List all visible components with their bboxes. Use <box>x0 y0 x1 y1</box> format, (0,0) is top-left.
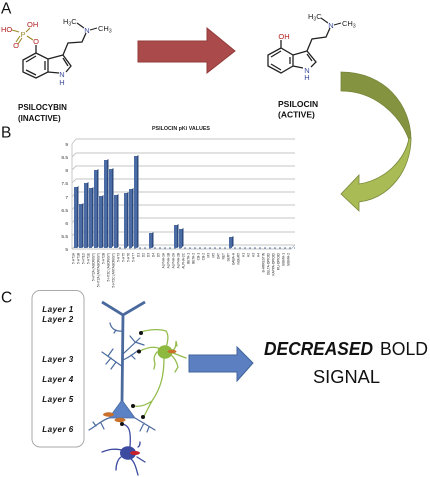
orange synapses <box>103 412 126 422</box>
bar chart: psilocin pKi values: 8.5 <box>61 155 68 161</box>
bar chart: psilocin pKi values: NET <box>222 253 226 259</box>
panel label C: C <box>1 290 12 306</box>
bar chart: psilocin pKi values: H2 <box>246 253 250 257</box>
bar chart: psilocin pKi values: ALPHA-2A <box>172 252 176 268</box>
bar chart: psilocin pKi values: 5.5 <box>61 234 68 240</box>
chart title: PSILOCIN pKi VALUES <box>152 126 211 132</box>
bar chart: psilocin pKi values: SIGMA-2 <box>286 253 290 266</box>
psilocin molecule: 3 <box>353 24 356 30</box>
bar chart: psilocin pKi values: 5-HT2C (ANTAGONIST) <box>112 253 116 288</box>
bar chart: psilocin pKi values: H1 <box>242 253 246 257</box>
psilocybin molecule: OH <box>27 20 38 29</box>
psilocybin molecule: H <box>59 78 65 87</box>
bar chart: psilocin pKi values: GABA-A <box>232 252 236 265</box>
result text: DECREASED <box>264 338 373 359</box>
panel: cortical layers: Layer 4 <box>42 375 74 384</box>
psilocybin molecule: O <box>13 41 19 50</box>
psilocybin molecule: N <box>84 26 90 35</box>
psilocybin molecule: N <box>59 70 65 79</box>
bar chart: psilocin pKi values: B-ARRESTIN <box>262 252 266 272</box>
bar chart: psilocin pKi values: M5 <box>212 253 216 257</box>
bar chart: psilocin pKi values: SIGMA-1 <box>282 253 286 266</box>
bar chart: psilocin pKi values: DELTA-OPIOID <box>266 252 270 275</box>
bar chart: psilocin pKi values: 7 <box>65 195 68 201</box>
bar chart: psilocin pKi values: 5-HT2C (AGONIST) <box>106 253 110 282</box>
bar chart: psilocin pKi values: KAPPA-OPIOID <box>272 252 276 276</box>
psilocybin molecule: H <box>63 17 68 26</box>
bar chart: psilocin pKi values: D5 <box>156 253 160 257</box>
bar chart: psilocin pKi values: 5-HT1E <box>86 253 90 264</box>
psilocin molecule: N <box>304 66 310 75</box>
psilocybin molecule: HO <box>1 25 12 34</box>
bar chart: psilocin pKi values: 7.5 <box>61 181 68 187</box>
bar chart: psilocin pKi values: H3 <box>252 253 256 257</box>
panel: cortical layers: Layer 3 <box>42 355 74 364</box>
psilocin molecule: C <box>316 12 322 21</box>
bar chart: psilocin pKi values: 5-HT1D <box>82 252 86 264</box>
arrow: green curved <box>341 72 411 211</box>
bar chart: psilocin pKi values: 5-HT1A <box>72 252 76 264</box>
panel label B: B <box>1 124 11 142</box>
psilocybin molecule: O <box>33 37 39 46</box>
psilocybin molecule: C <box>71 17 77 26</box>
psilocin label: (ACTIVE) <box>278 110 315 120</box>
psilocybin molecule: 3 <box>68 22 71 28</box>
psilocybin molecule: 3 <box>109 28 112 34</box>
bar chart: psilocin pKi values: DAT <box>216 253 220 259</box>
bar chart: psilocin pKi values: 5-HT6 <box>126 253 130 262</box>
bar chart: psilocin pKi values: D4 <box>152 253 156 257</box>
blue interneuron <box>102 422 145 475</box>
bar chart: psilocin pKi values: 5 <box>65 247 68 253</box>
bar chart: psilocin pKi values: CB-1 <box>196 253 200 260</box>
bar chart: psilocin pKi values <box>61 139 295 288</box>
bar chart: psilocin pKi values: 6 <box>65 221 68 227</box>
psilocin molecule: N <box>328 21 334 30</box>
bar chart: psilocin pKi values: 5-HT5 <box>122 253 126 262</box>
bar chart: psilocin pKi values: 5-HT7 <box>132 253 136 262</box>
bar chart: psilocin pKi values: H4 <box>256 253 260 257</box>
psilocin molecule: H <box>304 73 310 82</box>
panel: cortical layers: Layer 5 <box>42 395 74 404</box>
psilocin molecule: H <box>308 12 313 21</box>
bar chart: psilocin pKi values: 5-HT2A (AGONIST) <box>92 253 96 281</box>
panel: cortical layers: Layer 2 <box>42 315 74 324</box>
psilocybin label: (INACTIVE) <box>18 114 61 123</box>
psilocin label: PSILOCIN <box>278 99 318 109</box>
bar chart: psilocin pKi values: ALPHA-1B <box>166 253 170 268</box>
psilocin molecule: 3 <box>313 16 316 22</box>
psilocybin molecule: CH <box>98 24 109 33</box>
bar chart: psilocin pKi values: 8 <box>65 168 68 174</box>
bar chart: psilocin pKi values: SERT <box>226 253 230 261</box>
green interneuron <box>131 330 186 419</box>
bar chart: psilocin pKi values: ALPHA-2B <box>176 253 180 268</box>
panel: cortical layers <box>32 290 84 447</box>
bar chart: psilocin pKi values: BETA-1 <box>186 253 190 264</box>
arrow: red <box>138 28 235 73</box>
bar chart: psilocin pKi values: ALPHA-2C <box>182 252 186 269</box>
bar chart: psilocin pKi values: M3 <box>206 253 210 257</box>
bar chart: psilocin pKi values: D2 <box>142 253 146 257</box>
bar chart: psilocin pKi values: D1 <box>136 253 140 257</box>
bar chart: psilocin pKi values: 5-HT2B <box>102 253 106 264</box>
bar chart: psilocin pKi values: 5-HT1B <box>76 253 80 264</box>
bar chart: psilocin pKi values: 9 <box>65 142 68 148</box>
bar chart: psilocin pKi values: BETA-2 <box>192 253 196 264</box>
result text: BOLD <box>380 338 428 359</box>
arrow: blue <box>189 347 253 381</box>
result text: SIGNAL <box>313 366 380 387</box>
bar chart: psilocin pKi values: 6.5 <box>61 208 68 214</box>
bar chart: psilocin pKi values: 5-HT3 <box>116 253 120 262</box>
psilocybin molecule: P <box>20 30 26 39</box>
psilocin molecule <box>268 12 356 82</box>
psilocybin label: PSILOCYBIN <box>18 103 67 112</box>
psilocin molecule: OH <box>278 32 290 41</box>
bar chart: psilocin pKi values: ALPHA-1A <box>162 252 166 268</box>
pyramidal neuron <box>89 302 155 432</box>
panel: cortical layers: Layer 1 <box>42 305 74 314</box>
panel: cortical layers: Layer 6 <box>42 425 74 434</box>
bar chart: psilocin pKi values: mGluR5 <box>236 253 240 265</box>
bar chart: psilocin pKi values: D3 <box>146 253 150 257</box>
panel label A: A <box>1 0 12 18</box>
bar chart: psilocin pKi values: 5-HT2A (ANTAGONIST) <box>96 253 100 287</box>
psilocybin molecule <box>1 17 112 87</box>
bar chart: psilocin pKi values: MU-OPIOID <box>276 252 280 270</box>
psilocin molecule: CH <box>342 19 353 28</box>
bar chart: psilocin pKi values: CB-2 <box>202 253 206 260</box>
